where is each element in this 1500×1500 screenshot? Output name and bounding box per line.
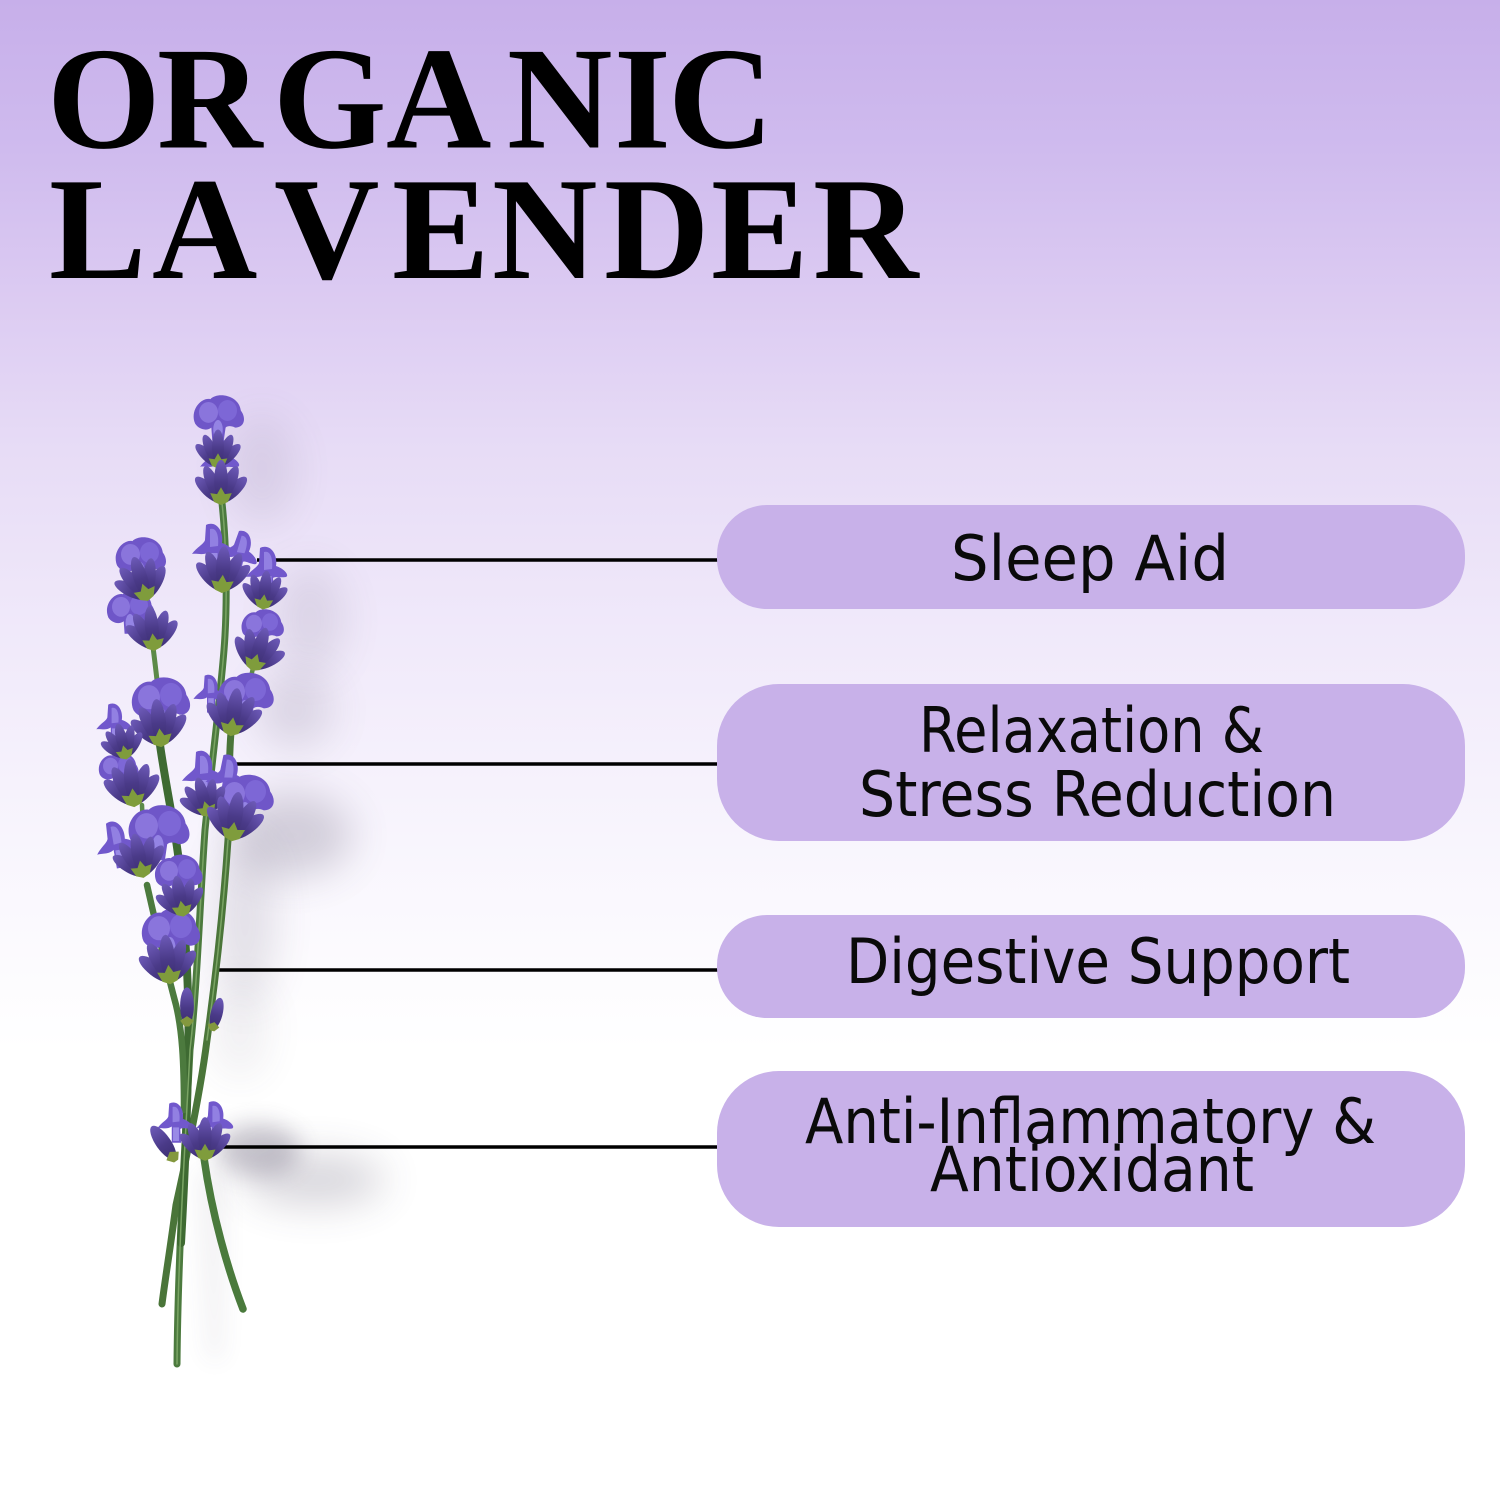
pill: Relaxation and Stress Reduction: Stress Reduction <box>859 758 1336 831</box>
title <box>47 18 920 310</box>
title line: LAVENDER: LAVENDER <box>49 148 920 310</box>
pill: Sleep Aid <box>717 505 1465 609</box>
pill: Digestive Support: Digestive Support <box>846 925 1350 998</box>
pill: Anti-Inflammatory and Antioxidant <box>717 1071 1465 1227</box>
stems <box>142 503 253 1364</box>
title line: ORGANIC: ORGANIC <box>47 18 773 180</box>
lavender soft shadows <box>198 415 385 1360</box>
pill: Digestive Support <box>717 915 1465 1018</box>
lavender sprig illustration <box>92 395 294 1364</box>
pill: Relaxation and Stress Reduction <box>717 684 1465 841</box>
blossom buds <box>94 429 294 1165</box>
pill: Sleep Aid: Sleep Aid <box>951 522 1229 595</box>
pill: Anti-Inflammatory and Antioxidant: Antioxidant <box>930 1133 1254 1206</box>
pill: Relaxation and Stress Reduction: Relaxation & <box>919 694 1264 767</box>
connector lines <box>216 560 718 1147</box>
blossom petals <box>92 395 287 1144</box>
panel: benefit pills <box>717 505 1465 1227</box>
pill: Anti-Inflammatory and Antioxidant: Anti-Inflammatory & <box>805 1085 1376 1158</box>
